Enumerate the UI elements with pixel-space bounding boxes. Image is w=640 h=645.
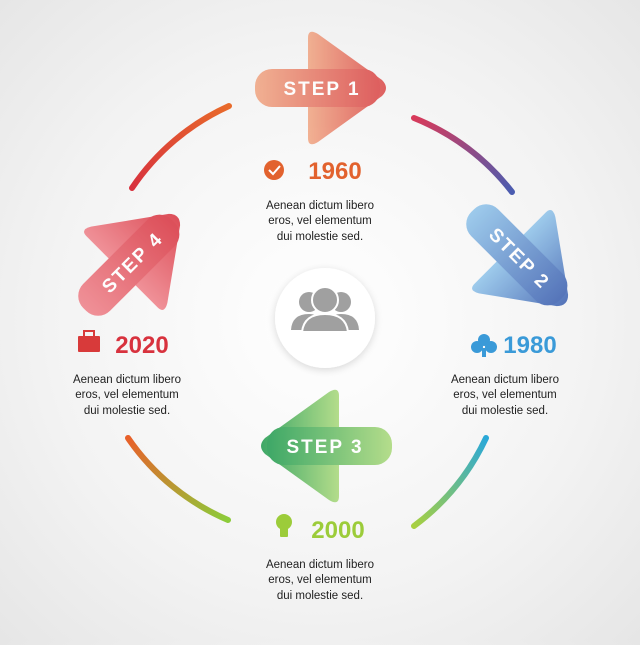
year 2020 block: Aenean dictum libero — [73, 374, 181, 386]
year 2000 block — [266, 514, 374, 602]
arrow: step 2: STEP 2 — [484, 224, 554, 294]
year 2000 block: dui molestie sed. — [277, 590, 363, 602]
arrow: step 1: STEP 1 — [283, 79, 361, 100]
arrow: step 3 — [261, 390, 392, 502]
year 1980 block: dui molestie sed. — [462, 405, 548, 417]
year 1980 block — [451, 332, 559, 417]
year 1960 block: 1960 — [308, 158, 362, 185]
year 2020 block: 2020 — [115, 332, 169, 359]
year 2020 block: eros, vel elementum — [75, 389, 179, 401]
arrow: step 3: STEP 3 — [286, 437, 364, 458]
arc: top-left — [132, 106, 229, 188]
year 1960 block — [264, 158, 374, 243]
year 1960 block: Aenean dictum libero — [266, 200, 374, 212]
arc: top-right — [414, 118, 512, 192]
center circle with people icon — [275, 268, 375, 368]
year 2020 block: dui molestie sed. — [84, 405, 170, 417]
year 1960 block: eros, vel elementum — [268, 215, 372, 227]
year 2000 block: eros, vel elementum — [268, 574, 372, 586]
year 1980 block: Aenean dictum libero — [451, 374, 559, 386]
year 2000 block: Aenean dictum libero — [266, 559, 374, 571]
arc: bottom-right — [414, 438, 486, 526]
year 2020 block — [73, 331, 181, 417]
year 2000 block: 2000 — [311, 517, 365, 544]
year 1980 block: 1980 — [503, 332, 557, 359]
arrow: step 2 — [433, 171, 605, 343]
arrow: step 1 — [255, 32, 386, 144]
arrow: step 4 — [45, 177, 217, 349]
year 1980 block: eros, vel elementum — [453, 389, 557, 401]
arrow: step 4: STEP 4 — [98, 228, 168, 298]
year 1960 block: dui molestie sed. — [277, 231, 363, 243]
arc: bottom-left — [128, 438, 228, 520]
